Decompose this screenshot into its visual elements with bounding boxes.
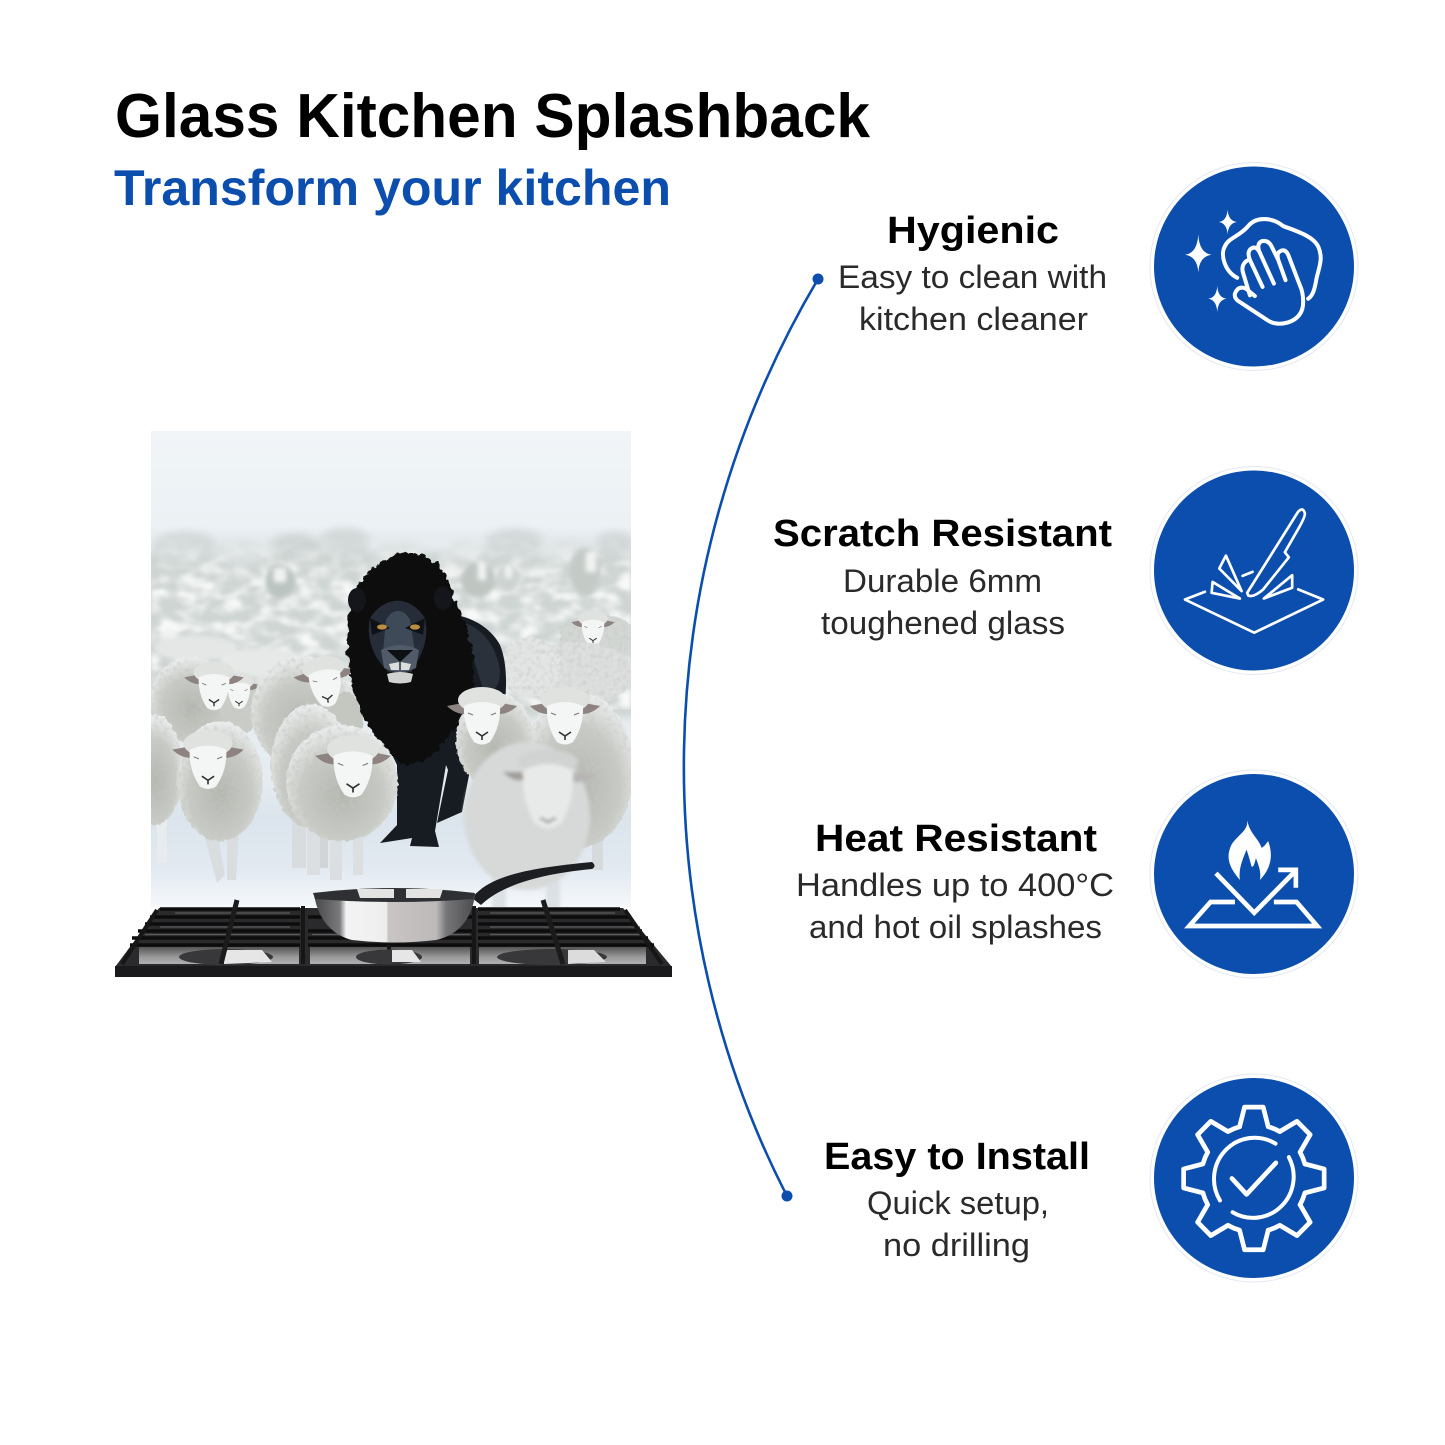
lion face <box>369 601 426 672</box>
far left sheep <box>151 714 181 860</box>
frying pan <box>313 862 594 942</box>
feature text: Easy to Install: Easy to Install <box>824 1136 1090 1178</box>
sheep: upper middle <box>250 656 364 757</box>
black lion <box>347 553 506 847</box>
subtitle: Transform your kitchen <box>114 160 671 216</box>
rear right sheep <box>503 612 631 701</box>
feature text: Heat Resistant: and hot oil splashes <box>809 909 1102 945</box>
feature text: Scratch Resistant <box>773 513 1112 641</box>
grates <box>130 909 654 945</box>
feature text: Heat Resistant: Heat Resistant <box>815 818 1097 860</box>
icon: flame over heat-reflecting surface <box>1150 770 1358 978</box>
feature text: Heat Resistant: Handles up to 400°C <box>796 867 1114 903</box>
feature text: Hygienic <box>838 210 1107 337</box>
title: Glass Kitchen Splashback <box>115 82 870 151</box>
feature text: Hygienic: Hygienic <box>887 210 1059 252</box>
feature text: Easy to Install <box>824 1136 1090 1263</box>
feature text: Scratch Resistant: Durable 6mm <box>843 563 1042 599</box>
feature text: Scratch Resistant: Scratch Resistant <box>773 513 1112 555</box>
icon: gear with check mark <box>1150 1074 1358 1282</box>
burner wells <box>139 947 299 964</box>
distant blurred flock <box>130 528 650 717</box>
lion body <box>380 615 506 847</box>
sheep: upper left <box>150 657 261 743</box>
sheep: far right <box>530 688 631 870</box>
burners <box>179 949 273 965</box>
hob surface <box>115 908 672 967</box>
gas hob <box>115 862 672 977</box>
sheep: blurred foreground <box>464 742 597 910</box>
icon: knife scratching glass <box>1150 466 1358 674</box>
sheep behind centre <box>270 703 341 868</box>
feature text: Hygienic: Easy to clean with <box>838 259 1107 295</box>
lion mane <box>347 553 474 765</box>
sheep: front left <box>172 721 263 883</box>
feature text: Easy to Install: Quick setup, <box>867 1185 1049 1221</box>
splashback photo: lion among sheep <box>127 431 650 910</box>
connector arc with dots <box>684 274 824 1202</box>
sheep: right of lion <box>447 687 532 780</box>
front edge <box>115 966 672 977</box>
feature text: Easy to Install: no drilling <box>883 1227 1030 1263</box>
feature text: Scratch Resistant: toughened glass <box>821 605 1065 641</box>
product image: splashback above gas hob with pan <box>115 431 672 977</box>
sheep: front centre <box>286 725 398 880</box>
icon: hand wiping with sparkles <box>1150 162 1358 370</box>
feature text: Heat Resistant <box>796 818 1114 945</box>
feature text: Hygienic: kitchen cleaner <box>859 301 1088 337</box>
